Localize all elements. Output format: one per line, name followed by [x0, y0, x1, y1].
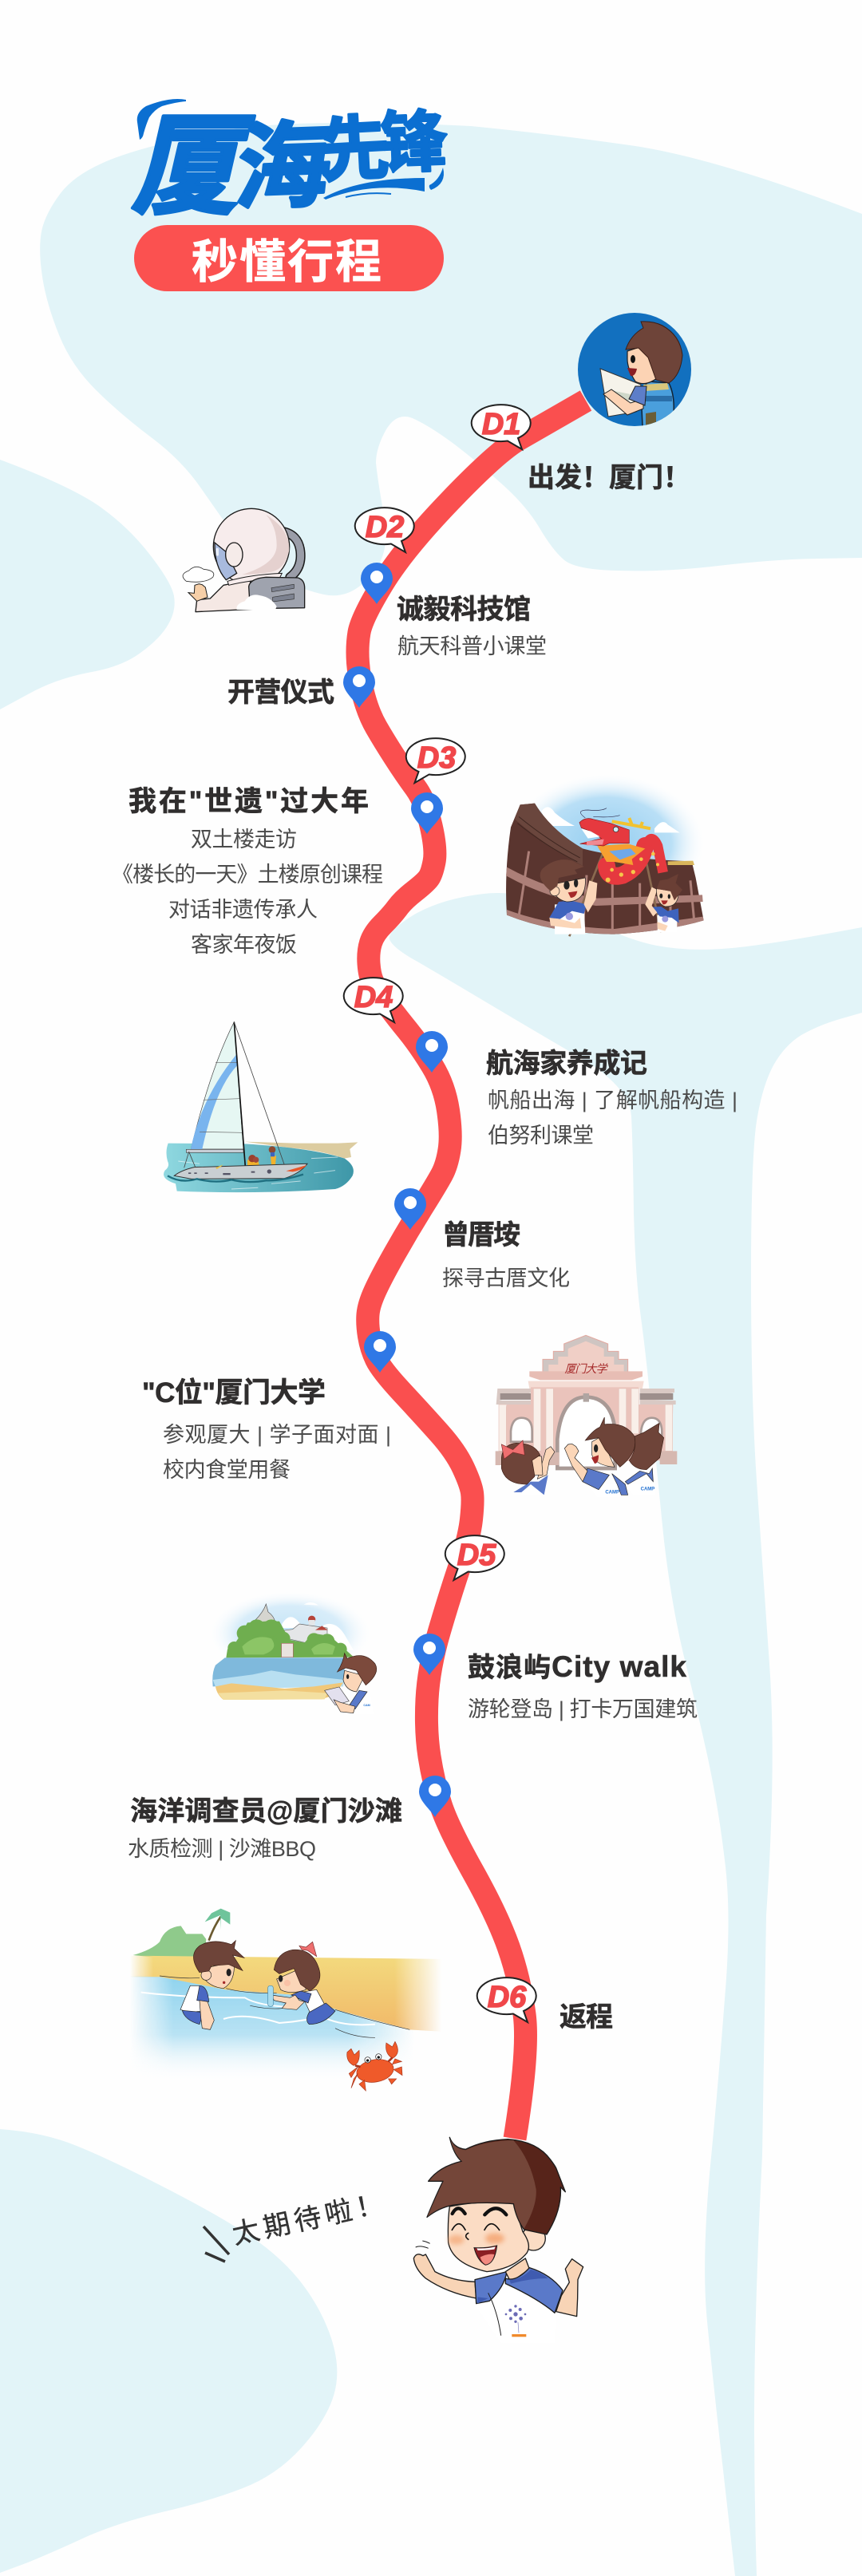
logo: 厦海先锋: 先 [318, 109, 392, 191]
bubble: D1: D1 [482, 408, 520, 441]
bubble: D6 [477, 1977, 536, 2022]
text block: navigator: 航海家养成记 [486, 1049, 647, 1079]
map pins [343, 563, 451, 1817]
logo: 厦海先锋 [125, 99, 449, 228]
illustration: tulou with dragon dance [506, 772, 706, 936]
text block: heritage new year: 对话非遗传承人 [168, 898, 318, 922]
text block: beach survey [128, 1796, 402, 1861]
illustration: Gulangyu island: CAM [363, 1704, 370, 1707]
text block: beach survey: 水质检测 | 沙滩BBQ [128, 1837, 316, 1861]
illustration: Gulangyu island [208, 1590, 377, 1714]
text: science museum detail: 航天科普小课堂 [397, 634, 547, 658]
text block: Zengcuoan [442, 1220, 570, 1290]
bubble: D3: D3 [417, 741, 456, 775]
illustration: Xiamen University gate with kids [496, 1335, 677, 1498]
bubble: D4: D4 [354, 981, 393, 1014]
text block: heritage new year: 《楼长的一天》土楼原创课程 [112, 863, 383, 887]
subtitle pill: 秒懂行程: 秒懂行程 [192, 236, 382, 288]
illustration: sailboat [164, 1022, 358, 1192]
text block: beach survey: 海洋调查员@厦门沙滩 [130, 1796, 402, 1827]
text: science museum heading: 诚毅科技馆 [397, 594, 531, 625]
text block: heritage new year: 我在"世遗"过大年 [129, 786, 369, 817]
illustration: Xiamen University gate with kids: 厦门大学 [564, 1362, 609, 1375]
illustration: Xiamen University gate with kids: CAMP [605, 1491, 619, 1495]
text block: Xiamen University: 参观厦大 | 学子面对面 | [163, 1423, 391, 1447]
illustration: astronaut [183, 508, 305, 612]
text block: heritage new year [112, 786, 383, 957]
icon: crab [347, 2041, 402, 2091]
bubble: D6: D6 [488, 1981, 527, 2014]
bubble: D5: D5 [457, 1539, 496, 1572]
text block: navigator [486, 1049, 737, 1148]
logo: 厦海先锋: 海 [231, 113, 337, 222]
text block: Xiamen University: 校内食堂用餐 [163, 1458, 291, 1482]
text block: Zengcuoan: 探寻古厝文化 [442, 1266, 570, 1290]
illustration: kids at beach with crab [128, 1909, 453, 2091]
red route ribbon [358, 401, 586, 2139]
bubble: D1 [472, 405, 531, 449]
illustration: happy boy [413, 2137, 583, 2344]
text block: Gulangyu: 鼓浪屿City walk [468, 1650, 686, 1683]
text block: Gulangyu: 游轮登岛 | 打卡万国建筑 [468, 1697, 698, 1721]
text block: heritage new year: 客家年夜饭 [191, 933, 297, 957]
illustration: Xiamen University gate with kids: CAMP [641, 1487, 654, 1491]
text: opening ceremony: 开营仪式 [227, 678, 334, 708]
bubble: D4 [344, 978, 403, 1022]
text block: Xiamen University: "C位"厦门大学 [142, 1377, 326, 1409]
subtitle pill: 秒懂行程 [134, 225, 444, 291]
icon: boy with map in blue circle [578, 313, 691, 426]
text block: navigator: 伯努利课堂 [488, 1124, 594, 1148]
logo: 厦海先锋: 厦 [125, 107, 262, 228]
text block: Gulangyu [468, 1650, 698, 1721]
text: return: 返程 [560, 2002, 613, 2033]
text block: Zengcuoan: 曾厝垵 [442, 1220, 520, 1250]
text: D1 departure: 出发！厦门！ [528, 463, 690, 493]
text block: heritage new year: 双土楼走访 [191, 828, 297, 851]
bubble: D2 [355, 508, 414, 552]
text block: navigator: 帆船出海 | 了解帆船构造 | [488, 1088, 737, 1112]
bubble: D5 [445, 1535, 504, 1580]
text block: Xiamen University [142, 1377, 391, 1482]
bubble: D2: D2 [366, 511, 404, 544]
logo: 厦海先锋: 锋 [379, 104, 449, 181]
text: can't wait: 太期待啦！ [230, 2189, 386, 2250]
bubble: D3 [406, 738, 465, 783]
